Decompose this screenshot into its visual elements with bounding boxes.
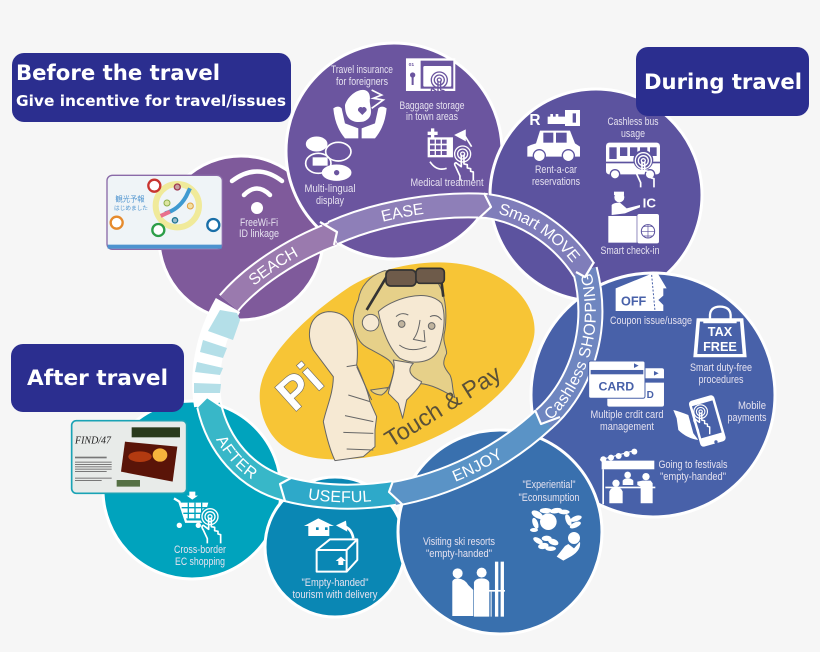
card: tourism forecast map: はじめました: [114, 205, 148, 212]
text: festivals: [658, 459, 728, 483]
text: experiential consumption: "Econsumption: [518, 492, 580, 504]
text: FreeWi-Fi ID linkage: FreeWi-Fi: [240, 217, 278, 229]
circle: ease: [286, 43, 502, 259]
text: ski resorts: [423, 536, 495, 560]
heading: before the travel: Before the travel: [16, 61, 220, 85]
icon: festival stall: [600, 449, 655, 504]
icon: baggage storage: 01: [409, 62, 414, 68]
circle: after: [103, 401, 281, 579]
ribbon label: Smart MOVE: Smart MOVE: [499, 204, 580, 262]
text: rent-a-car: [532, 164, 580, 188]
icon: credit cards: [589, 361, 664, 407]
circle: shopping: [531, 273, 775, 517]
text: experiential consumption: [518, 479, 580, 504]
text: empty-handed tourism: [292, 577, 378, 601]
text: travel insurance: Travel insurance: [331, 64, 393, 76]
card: tourism forecast map: 観光予報: [115, 194, 145, 203]
ribbon label: AFTER: AFTER: [216, 438, 256, 480]
text: cross-border EC shopping: [174, 544, 226, 568]
card: Find47 website screenshot: FIND/47: [74, 435, 112, 446]
icon: travel insurance: [333, 90, 387, 138]
card: tourism forecast map: [107, 175, 222, 249]
icon: rent-a-car: [527, 110, 580, 162]
icon: coupon: OFF: [621, 294, 647, 308]
icon: shopping cart: [174, 492, 221, 543]
icon: ski resort counter: [452, 562, 505, 617]
text: credit cards: [590, 409, 664, 433]
text: coupon: Coupon issue/usage: [610, 315, 692, 327]
text: travel insurance: for foreigners: [336, 76, 388, 88]
icon: baggage storage: [406, 58, 455, 107]
ribbon arrow heads: [197, 193, 594, 505]
heading: before the travel: [12, 53, 291, 122]
text: credit cards: management: [600, 421, 654, 433]
text: rent-a-car: reservations: [532, 176, 580, 188]
ribbon label: Cashless SHOPPING: Cashless SHOPPING: [545, 274, 596, 418]
ribbon label: SEACH: SEACH: [249, 246, 298, 284]
heading: during travel: During travel: [644, 70, 802, 94]
circle: enjoy: [398, 430, 602, 634]
text: ski resorts: Visiting ski resorts: [423, 536, 495, 548]
text: baggage storage: [400, 100, 464, 123]
text: credit cards: Multiple crdit card: [590, 409, 664, 421]
text: duty-free: procedures: [698, 374, 744, 386]
text: festivals: Going to festivals: [658, 459, 728, 471]
icon: tax free bag: FREE: [703, 340, 737, 354]
text: duty-free: [690, 362, 752, 386]
text: empty-handed tourism: "Empty-handed": [302, 577, 369, 589]
icon: tax free bag: TAX: [708, 325, 733, 339]
icon: smart check-in: [608, 192, 659, 243]
icon: wifi: [232, 172, 282, 214]
text: cashless bus: [608, 116, 659, 140]
text: mobile payments: Mobile: [738, 400, 766, 412]
label: Touch and Pay: Touch & Pay: [380, 360, 506, 452]
icon: tax free bag: [693, 307, 747, 357]
text: FreeWi-Fi ID linkage: ID linkage: [239, 228, 279, 240]
journey ribbon: [206, 205, 590, 497]
text: festivals: "empty-handed": [660, 471, 726, 483]
heading: after travel: After travel: [27, 366, 168, 390]
icon: rent-a-car: R: [529, 112, 540, 129]
heading: after travel: [11, 344, 184, 412]
text: smart check-in: Smart check-in: [600, 245, 660, 257]
text: travel insurance: [331, 64, 393, 88]
icon: multi-lingual display: [306, 137, 351, 180]
text: cross-border EC shopping: Cross-border: [174, 544, 226, 556]
icon: coupon: [616, 272, 667, 311]
icon: fruit branch and hand: [530, 507, 583, 561]
text: experiential consumption: "Experiential": [522, 479, 576, 491]
text: cashless bus: usage: [621, 128, 645, 140]
icon: medical treatment: [428, 128, 473, 181]
heading: before the travel: Give incentive for travel/issues: [16, 92, 286, 110]
icon: cashless bus: [606, 143, 660, 187]
card: Find47 website screenshot: [72, 421, 187, 493]
circle: useful: [265, 477, 405, 617]
text: baggage storage: in town areas: [406, 111, 458, 123]
text: rent-a-car: Rent-a-car: [535, 164, 577, 176]
logo: Pi: Pi: [266, 353, 333, 420]
ribbon label: USEFUL: USEFUL: [309, 488, 372, 502]
text: duty-free: Smart duty-free: [690, 362, 752, 374]
ribbon stripes: [194, 310, 240, 393]
text: mobile payments: [728, 400, 767, 424]
text: multi-lingual display: display: [316, 195, 344, 207]
central yellow ellipse: [260, 262, 535, 459]
text: cashless bus: Cashless bus: [608, 116, 659, 128]
character giving thumbs up: [309, 268, 455, 461]
circle: search: [159, 156, 323, 320]
text: ski resorts: "empty-handed": [426, 548, 492, 560]
ribbon label: ENJOY: ENJOY: [452, 448, 500, 482]
text: cross-border EC shopping: EC shopping: [175, 556, 225, 568]
icon: mobile payments: [673, 394, 727, 448]
icon: credit cards: CARD: [599, 379, 634, 393]
icon: house and parcel: [304, 518, 357, 572]
text: mobile payments: payments: [728, 412, 767, 424]
text: baggage storage: Baggage storage: [400, 100, 464, 112]
text: empty-handed tourism: tourism with delivery: [292, 589, 378, 601]
heading: during travel: [636, 47, 809, 116]
icon: smart check-in: IC: [643, 195, 656, 210]
circle: smart move: [490, 89, 702, 301]
text: multi-lingual display: [304, 183, 356, 207]
text: medical treatment: Medical treatment: [410, 177, 484, 189]
icon: credit cards: D: [647, 390, 654, 401]
text: multi-lingual display: Multi-lingual: [304, 183, 356, 195]
text: FreeWi-Fi ID linkage: [239, 217, 279, 240]
ribbon label: EASE: EASE: [381, 203, 424, 222]
